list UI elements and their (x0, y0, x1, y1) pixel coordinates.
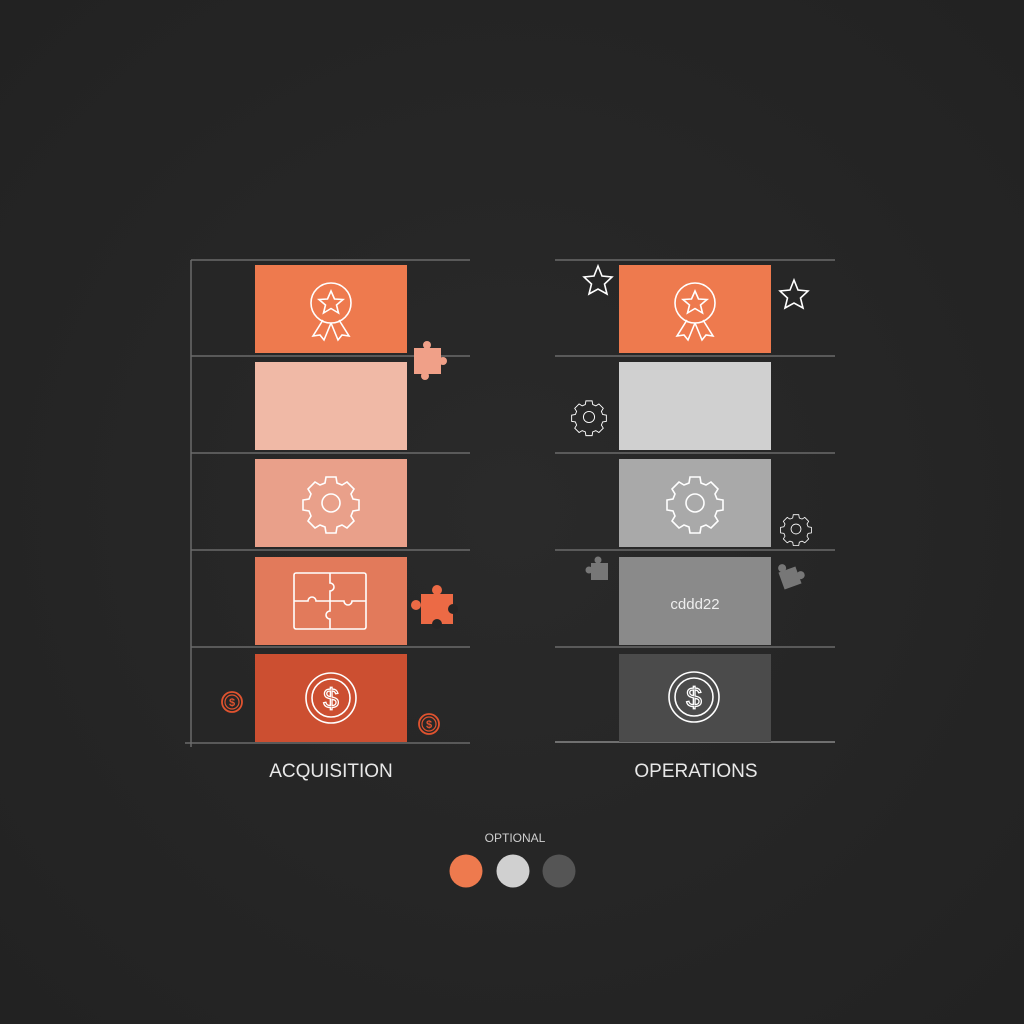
bar: operations 4 text (619, 557, 771, 645)
icon: coin right (419, 714, 439, 734)
legend (450, 831, 576, 888)
bar: operations 2 (619, 362, 771, 450)
icon: gear right (781, 515, 811, 546)
icon: coin left (222, 692, 242, 712)
icon: star right (780, 280, 808, 308)
bar: acquisition 2 (255, 362, 407, 450)
bar: acquisition 5 dollar: $ (323, 683, 339, 714)
icon: puzzle right grey (776, 558, 807, 590)
panel: acquisition chart (185, 260, 470, 747)
bar: operations 3 gear (619, 459, 771, 547)
bar: operations 5 dollar: $ (686, 682, 702, 713)
bar: operations 4 text: cddd22 (670, 596, 720, 613)
bar: acquisition 5 dollar (255, 654, 407, 742)
label: operations: OPERATIONS (634, 761, 758, 782)
icon: star left (584, 266, 612, 294)
bar: acquisition 4 puzzle (255, 557, 407, 645)
label: acquisition: ACQUISITION (269, 761, 393, 782)
bar: acquisition 1 award (255, 265, 407, 353)
icon: gear left (572, 401, 606, 436)
icon: coin right: $ (426, 719, 432, 731)
bar: acquisition 3 gear (255, 459, 407, 547)
icon: puzzle piece top (414, 341, 447, 380)
bar: operations 5 dollar (619, 654, 771, 742)
icon: coin left: $ (229, 697, 235, 709)
icon: puzzle left grey (586, 556, 608, 580)
legend: OPTIONAL (485, 831, 546, 845)
icon: puzzle piece bottom (411, 585, 458, 629)
bar: operations 1 award (619, 265, 771, 353)
panel: operations chart (555, 260, 835, 742)
